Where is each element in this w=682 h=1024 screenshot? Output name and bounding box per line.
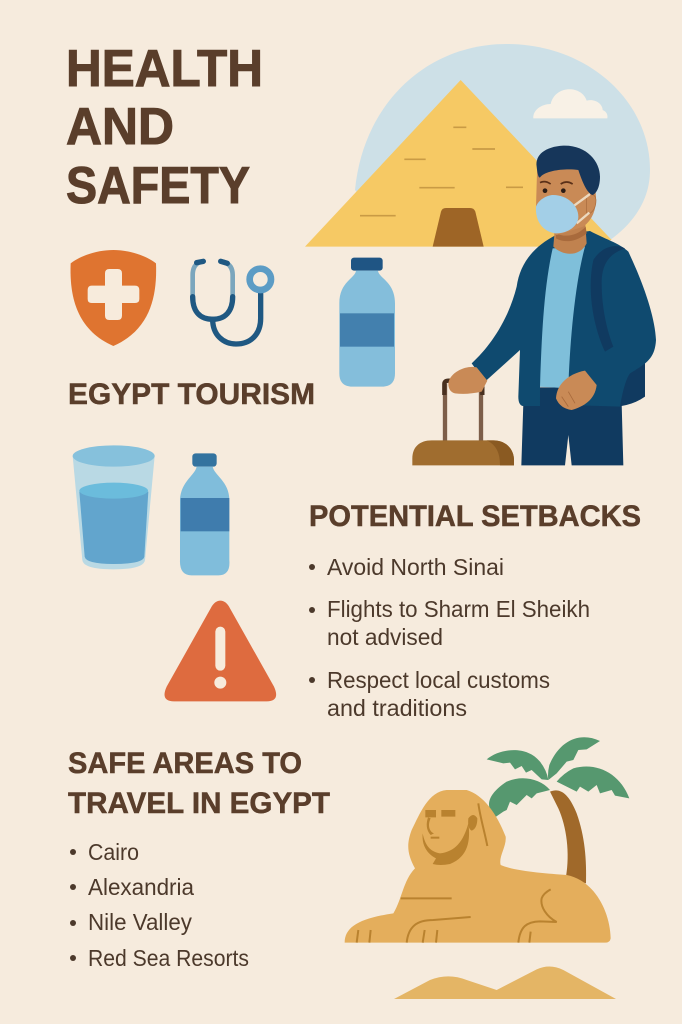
heading: potential setbacks: POTENTIAL SETBACKS [309,500,641,533]
icon: large water bottle [339,258,395,387]
title: SAFETY [66,157,250,215]
list: safe areas [70,839,249,971]
illustration: palm tree [487,737,629,883]
list: setbacks: Respect local customs [327,667,550,693]
title: AND [66,98,174,156]
list: safe areas: Cairo [88,839,139,865]
illustration: sand dunes [394,966,616,999]
illustration: pyramid and sky [305,44,650,247]
list: setbacks: not advised [327,624,443,650]
heading: safe areas: SAFE AREAS TO [68,747,302,780]
icon: warning triangle [165,601,276,701]
list: safe areas: Red Sea Resorts [88,945,249,971]
list: safe areas: Nile Valley [88,909,192,935]
icon: stethoscope [193,261,271,344]
title [66,40,263,215]
title: HEALTH [66,40,263,98]
list: setbacks [309,554,590,721]
list: setbacks: Flights to Sharm El Sheikh [327,596,590,622]
icon: shield with cross [71,250,156,346]
icon: small water bottle [180,453,229,575]
illustration: sphinx [345,790,611,943]
heading: safe areas [68,747,330,820]
panel: safe areas [68,747,330,971]
list: setbacks: and traditions [327,695,467,721]
list: setbacks: Avoid North Sinai [327,554,504,580]
icon: suitcase [412,381,514,465]
panel: potential setbacks [309,500,641,721]
list: safe areas: Alexandria [88,874,194,900]
heading: Egypt Tourism: EGYPT TOURISM [68,378,315,411]
icon: glass of water [73,445,155,569]
heading: safe areas: TRAVEL IN EGYPT [68,787,330,820]
illustration: masked traveller with suitcase [412,146,656,465]
